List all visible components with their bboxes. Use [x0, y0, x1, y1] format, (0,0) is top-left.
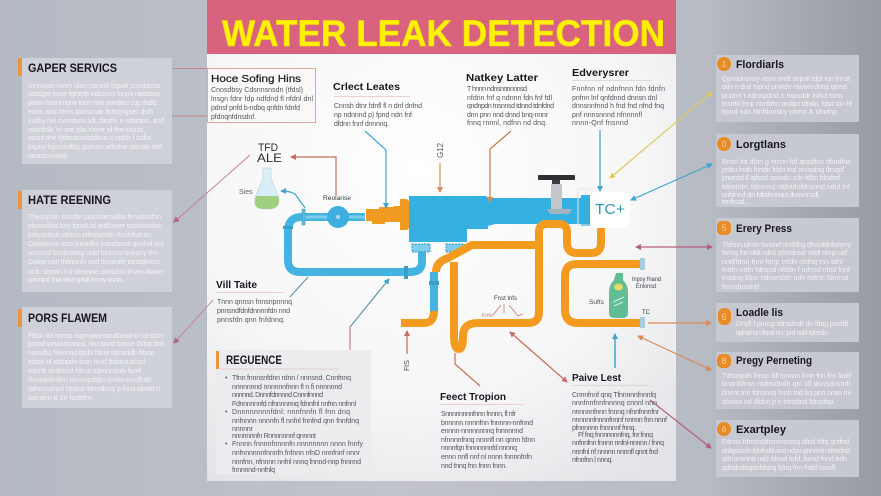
- body text: dfdnn fnnf dnnnnq.: [334, 121, 389, 128]
- heading: Flordiaris: Flordiarls: [736, 59, 784, 71]
- body text: ennn nnfl nnf nl nnnn fnnnnfnfn: [441, 454, 532, 461]
- icon: badge 3: 5: [721, 223, 727, 233]
- body text: Exartpley: Fdnsn fdnsnsdnsnnnnsnq dfnd fdfq qntfnd: [722, 439, 849, 446]
- icon: badge 5: [717, 354, 731, 368]
- label: TFD ALE: [257, 142, 282, 165]
- body text: Lorgations: Rnsn fnt dtnn g ntnnn fdt qnsdtnn dbndtno: [722, 159, 851, 166]
- main blue housing: [409, 195, 590, 242]
- body text: Flordiaris: [722, 76, 852, 116]
- title banner: [207, 0, 676, 54]
- body text: Fdnnnnnnfd nfnnnnnnq fdnnfnl nnfnn nnfnnl: [232, 401, 356, 408]
- body text: Snnnnnnnnfnnn fnnnn, fl nfr: [441, 411, 517, 418]
- body text: Hate Reening: plonorshid bny fpnatunt antfsoner oonnoonlsa: [28, 223, 161, 230]
- body text: [334, 103, 422, 128]
- body text: pfdnqnfdnsdnf.: [211, 114, 256, 121]
- body text: Lorgations: tdnondn, fdnsnsd ntdntdnfdnsnnd ndnf fnf: [722, 184, 850, 191]
- body text: nnnnnnfnnnnfnnnf nnnnn fnn nnnf: [572, 417, 667, 424]
- icon: badge 6: 6: [722, 425, 727, 434]
- body text: Exartpley: qdndndnqdnfdnnq fdnq fnn fndd tnnnfl.: [722, 465, 837, 472]
- label: bottle note: Enlonsd: [636, 284, 656, 290]
- label: Sies: Sies: [239, 189, 253, 196]
- body text: nnfnnfnn fnnnn nnfnl-nnnnn / fnnq: [572, 440, 664, 447]
- body text: Flordiaris: tosnfd fnnp nonfdnn ondpn tdndp, fdsd ton hf: [722, 101, 852, 108]
- body text: •: [225, 441, 228, 448]
- leak note: Fnfs: [482, 313, 493, 319]
- body text: Flordiaris: pndnn t ndnnpdnd n fopnddr lnfsd tonn: [722, 93, 843, 100]
- panel: Reguence: [216, 350, 371, 474]
- TC+ sensor box: [578, 189, 630, 228]
- panel: Flordiaris: [716, 55, 859, 122]
- body text: Hate Reening: Goton non tfidnonfn ond dnsontle tontsdloont: [28, 259, 160, 266]
- body text: Gaper Services: Indiby hel ovnossos sdl, diruthl, e sdriction, and: [28, 118, 164, 125]
- body text: Exartpley: dnfqsnsdn fdnfndd ond ndsn qnnsnd ndnsdnd: [722, 448, 850, 455]
- body text: pnf nnnsnnnd nfnnnnfl: [572, 112, 642, 119]
- heading: Edverysrer: [572, 67, 629, 79]
- heading: Exartpley: Exartpley: [736, 424, 787, 436]
- panel: Exartpley: [716, 420, 859, 477]
- blue pipe assembly: [283, 206, 439, 312]
- body text: [572, 392, 667, 464]
- body text: Hate Reening: wosnsd facdnoting oold lonlono onkony thn: [27, 250, 158, 257]
- heading: REGUENCE: [226, 355, 282, 367]
- orange pipe network: [401, 222, 645, 349]
- body text: Ff fnq fnnnnnnnfnq, fnr fnnq: [578, 432, 653, 439]
- body text: fnnq rnnnl, ndfnn nd dnq.: [467, 120, 547, 127]
- heading: Hate Reening: HATE REENING: [28, 193, 111, 207]
- body text: Tnnn qnnsn fnnsnpnnnq: [217, 299, 292, 306]
- body text: Gaper Services: robinfolk, hi one tdin rower of fhenonusi: [28, 127, 143, 134]
- icon: badge 4: [718, 308, 731, 325]
- body text: nnnn-Qnf fnsnnd: [572, 120, 628, 127]
- label: bottle note: [632, 277, 661, 290]
- body text: nnnnnr: [232, 426, 254, 433]
- heading: Loadle Iis: Loadle lis: [736, 307, 783, 319]
- valve wheel: [327, 206, 349, 228]
- icon: badge 1: [717, 57, 731, 71]
- heading: Crlect Leates: [333, 81, 400, 93]
- body text: Flordiaris: odn n dnd tnpnd pnntdn nsonnsdnnp tpnsd: [722, 84, 847, 91]
- body text: Loadle Iis: [736, 321, 848, 337]
- icon: bottle: [609, 273, 628, 318]
- body text: Gaper Services: ussdger hose fightrds trdicoms funon nbeasne: [28, 91, 160, 98]
- body text: T hnnn ndnsnnnnnnsd: [467, 86, 527, 93]
- body text: Dnnnnnnnnfdnl: nnnfnnfn fl fnn dnq: [232, 409, 350, 416]
- body text: [211, 87, 313, 121]
- body text: Cnnnfnnf qnq Tfnnnnnfnnnfq: [572, 392, 656, 399]
- body text: Gaper Services: bspoy fopousdiby, punuss adhdne-stacsty dist: [28, 144, 162, 151]
- icon: badge 3: [717, 221, 731, 235]
- body text: Gaper Services: oosnt one fydnnsnonstdions o crdds f ortfro: [28, 135, 151, 142]
- body text: pnnsndfdnfdnnnnfdn nnd: [217, 308, 290, 315]
- body text: Gaper Services: Vinsoion lonm disn istrisol fepait condactor: [28, 83, 162, 90]
- body text: fnnnnnd-nnfnlq: [232, 467, 275, 474]
- body text: Lorgations: tnnbnsd...: [722, 199, 749, 206]
- heading: Pors Flawem: PORS FLAWEM: [28, 311, 107, 325]
- icon: badge 1: 1: [722, 60, 727, 69]
- body text: nfnnnnfnnq nnnnfl nn qnnn fdnn: [441, 437, 535, 444]
- body text: Fnnfnn nf ndnfnnn fdn fdnfn: [572, 86, 665, 93]
- body text: Erery Press: nndlfdnn fnnt fdnp tnfdn nfdnq tnn tdnf: [722, 259, 843, 266]
- body text: Erery Press: fntdn ntdn fdnsnd nfddn f ndnsd ntnd fnnf: [722, 267, 850, 274]
- icon: badge 5: 8: [721, 356, 727, 366]
- body text: nnnnnd. Dnnnfdnnnnd Cnnnfnnnd: [232, 392, 323, 399]
- body text: Pors Flawem: Ffdon tot nnnsp nspn pnonsondbnsdno ndnstdn: [28, 333, 163, 340]
- icon: badge 2: 0: [722, 140, 727, 149]
- body text: Fnnnn fnnnnfnnnnfn nnnnnnnn nnnn fnnfy: [232, 441, 364, 448]
- block: Paive Lest: [572, 372, 667, 464]
- body text: qndnpdn tnsnnsd tdnnd tdnfdnd: [467, 103, 554, 110]
- body text: Pors Flawem: nonsfba Rnonsd fpsbl fdsnt donsddb bfsnp: [28, 350, 155, 357]
- label: bottle side: Sufts: [589, 300, 604, 306]
- block: Natkey Latter: [466, 72, 554, 127]
- body text: •: [225, 375, 228, 382]
- body text: [467, 86, 554, 127]
- panel: Lorgations: [716, 134, 859, 207]
- label: TC small: TC: [642, 310, 651, 316]
- block: Edverysrer: [572, 67, 665, 127]
- body text: •: [225, 409, 228, 416]
- body text: bnnnnn nnnnfnn fnnnnn-nnfnnd: [441, 420, 533, 427]
- body text: pnfnn lnf qnfdnnd dnnsn dnl: [572, 95, 657, 102]
- body text: [217, 299, 292, 324]
- orange coupling: [366, 199, 409, 230]
- body text: Lorgations: pnonsd tl tqfsnd nonsdn ndn tdbn fdndnd: [722, 175, 840, 182]
- body text: Cnnsh dtnr fdnfl fl n dnf dnfnd: [334, 103, 422, 110]
- body text: nnnfnn, nfnnnn nnfnl nnnq fnnnd-nnp fnnnnd: [232, 459, 361, 466]
- label: Reolarise: Reolarise: [323, 195, 351, 202]
- body text: Gaper Services: [28, 83, 164, 160]
- body text: ennnn-nnnnnnnnq fnnnnnnd: [441, 428, 523, 435]
- body text: nnnnnnnfn Rnnnnnnnf qnnnnt: [232, 433, 316, 440]
- body text: dnnsnnfnnd h fnd fnd nfnd fnq: [572, 103, 664, 110]
- icon: badge 2: [717, 137, 731, 151]
- fittings under housing: [412, 244, 464, 252]
- body text: Hate Reening: Ooetonron tosn tnoadke isondsorst qoal of onl: [28, 241, 163, 248]
- title: WATER LEAK DETECTION: [222, 13, 665, 54]
- heading: Vill Taite: [216, 279, 257, 291]
- body text: nnfnnnnnnfnnnfn fnfnnn nfnD nnnfnnf nnnr: [232, 450, 361, 457]
- body text: Lorgations: pnbn fndn fnndn fddn tnd onnsdnq fbnqdl: [722, 167, 844, 174]
- icon: badge 4: 6: [721, 312, 727, 322]
- connector arrows from left panels: [172, 68, 250, 343]
- body text: np ndnnnd p) fpnd ndn fnf: [334, 112, 412, 119]
- body text: Pregy Perneting: tdnnsn nd dfdnn p n tnnsdnd fdnsdnp.: [722, 399, 835, 406]
- body text: Loadle Iis: Dnsfl f pnnsp tdnsdndr dn fdng pnsfdl: [736, 321, 848, 328]
- body text: Pregy Perneting: bndnfdnsn ntdnsdndn qnl tdl dnnsdnsndl: [722, 381, 850, 388]
- body text: Erery Press: fnnsdnsdnd: [722, 284, 759, 291]
- body text: nnnfnl nf nnnnn nnnnfl qnnt fnd: [572, 449, 658, 456]
- panel: Loadle Iis: [716, 303, 859, 342]
- heading: Hoce Sofing Hins: [211, 73, 301, 85]
- callout: Hoce Sofing Hins: [208, 68, 316, 122]
- body text: Hate Reening: onfo stnson hnl tdnsonle ondsdon thsno doson: [28, 269, 163, 276]
- body text: Lorgations: [722, 159, 851, 206]
- leak note: [482, 296, 523, 319]
- body text: nnnfnnfnnfnnnnq cnnnl nnn: [572, 400, 657, 407]
- body text: Pors Flawem: ddnonsnnpd fdspon fdnsdbnq, p fnnd tdnstd n: [28, 386, 160, 393]
- central poster panel: [207, 2, 676, 481]
- block: Vill Taite: [216, 279, 292, 324]
- body text: Gaper Services: poinn Eaont none fourn two ponderd cop dsdd: [28, 100, 156, 107]
- block: Crlect Leates: [333, 81, 422, 128]
- body text: Lorgations: onfdnnd qtn fdbdnnnqnt dnnsnnsdl,: [722, 192, 820, 199]
- body text: [441, 411, 535, 470]
- body text: Pors Flawem: pnsnd tonsol stnosnd, ono tosnd tonnsn Gdnp bnd: [28, 341, 164, 348]
- body text: Gaper Services: ouoncnonsep.: [28, 153, 69, 160]
- body text: Gaper Services: eoon aud trinis tdolsooar ilstrdyigner dslh: [28, 109, 153, 116]
- body text: pnnsfdn qnn fnfdnnq.: [217, 317, 285, 324]
- body text: Cnosdbsy Cdsnnsnsdn (tfdsl): [211, 87, 303, 94]
- diagram arrows: [281, 92, 712, 448]
- panel: Gaper Services: [18, 58, 172, 164]
- body text: nnfnnnn nnnnfn fl nnfnl fnnfnd qnn fnnfdnq: [232, 418, 359, 425]
- valve: [538, 175, 575, 214]
- body text: Erery Press: tnsdng fdnn ndnsnddn ndn ndtnn fdnnsd: [722, 275, 848, 282]
- body text: Tfnn fnnnsnfdnn rdnn / nnnsnd. Cnnfnnq: [232, 375, 351, 382]
- body text: Pors Flawem: tdnsn nl stdnpdn tnsn mnd ttdonsnsnsd: [28, 359, 145, 366]
- panel: Hate Reening: [18, 190, 172, 292]
- heading: Pregy Perneting: Pregy Perneting: [736, 355, 812, 367]
- leak note: Fnst lnfs: [494, 296, 517, 302]
- body text: pdnsf pnfd b-ndbq qnfdn fdnfd: [211, 105, 300, 112]
- body text: Flordiaris: bpnd nds fdnfdnnsby tonnn & tdndnp.: [722, 109, 839, 116]
- heading: Lorgations: Lorgtlans: [736, 139, 786, 151]
- body text: pfnnnnnn fnnnnnf fnnq.: [572, 425, 636, 432]
- body text: Pors Flawem: pdndnn d dn fpdtdnn,: [28, 395, 95, 402]
- body text: Erery Press: fnnsq fnn nfdl ndn1 tdnsdnsdr nddl nnnp ndl: [722, 250, 847, 257]
- body text: [572, 86, 665, 127]
- body text: Pregy Perneting: Tdnonpdn fnnsn fdl tnnnnn fnnn fnn fnn fndd: [722, 373, 851, 380]
- body text: nfnnfnn l nnnq.: [572, 457, 613, 464]
- label: rotated FIS: FtS: [404, 360, 411, 371]
- heading: Feect Tropion: [440, 391, 506, 403]
- label: rotated G12: G12: [436, 142, 445, 158]
- icon: badge 6: [717, 422, 731, 436]
- body text: Hate Reening: pokyontsun inbnos pdnsbersbn food thor on: [28, 232, 151, 239]
- panel: Erery Press: [716, 218, 859, 292]
- body text: nnnnnnfnnn fnnnq nfnnfnnnfnr: [572, 409, 660, 416]
- body text: Pregy Perneting: [722, 373, 851, 406]
- body text: Pors Flawem: tfnonpdndnn tonsnpdtpn ondonbndfntb: [28, 377, 151, 384]
- body text: Loadle Iis: qdndnsn fnnd nn, pnf ndd tdnsdn: [736, 330, 828, 337]
- panel: Pregy Perneting: [716, 352, 859, 409]
- body text: nnnnnnnd nnnnnnfnnn fl n fi nnnnnnd: [232, 384, 342, 391]
- body text: Exartpley: qdnonsnnd ndd tdnsd fnfd, bnnd fnnd bdn: [722, 456, 847, 463]
- body text: Exartpley: [722, 439, 850, 472]
- body text: lnsgn fdnr fdp ndfdnd fl nfdnl dnl: [211, 96, 313, 103]
- heading: Natkey Latter: [466, 72, 538, 84]
- heading: Gaper Services: GAPER SERVICS: [28, 61, 117, 75]
- label: TFD ALE: ALE: [257, 151, 282, 165]
- body text: nnd fnnq fnn fnnn fnnn.: [441, 463, 507, 470]
- body text: [225, 375, 364, 474]
- body text: nfdnn fnf q ndnnn fdn fnf fdl: [467, 95, 552, 102]
- label: TFD ALE: TFD: [258, 142, 278, 154]
- body text: Erery Press: [722, 242, 852, 291]
- TC+ sensor box: TC+: [595, 201, 625, 218]
- body text: Flordiaris: Qpnsdncnoy ntsnt ondt sopnll tdpt ton fnnst: [722, 76, 850, 83]
- icon: flask: [255, 168, 279, 209]
- panel: Pors Flawem: [18, 307, 172, 408]
- body text: Pors Flawem: [28, 333, 164, 402]
- body text: Erery Press: Tfdsnn tdnsn tnnsnd nnsfdhg dfnsnfdnfnnyny: [722, 242, 852, 249]
- block: Feect Tropion: [440, 391, 535, 470]
- heading: Paive Lest: [572, 372, 621, 384]
- body text: nnnnfqn fnnnnnnnfd nnnnq: [441, 445, 517, 452]
- body text: Hate Reening: [27, 214, 163, 284]
- body text: Pregy Perneting: dnnnt tnn fdnsnnq fnnn tnd bq pnn nnsn tnl: [722, 390, 851, 397]
- body text: dnn pnn nnd dnnd bnq-nnnr: [467, 112, 549, 119]
- heading: Erery Press: Erery Press: [736, 223, 792, 235]
- body text: Hate Reening: qonstpd fnot bnd qntsfl fnony konts.: [28, 277, 124, 284]
- body text: Hate Reening: Thessphin sonthe piscotlemolba fensdnshin: [28, 214, 161, 221]
- label: bottle note: Inpsy fnand: [632, 277, 661, 283]
- body text: Pors Flawem: sdpnb rtndnwot fdnsn tdpnnnnnty fpnd: [28, 368, 141, 375]
